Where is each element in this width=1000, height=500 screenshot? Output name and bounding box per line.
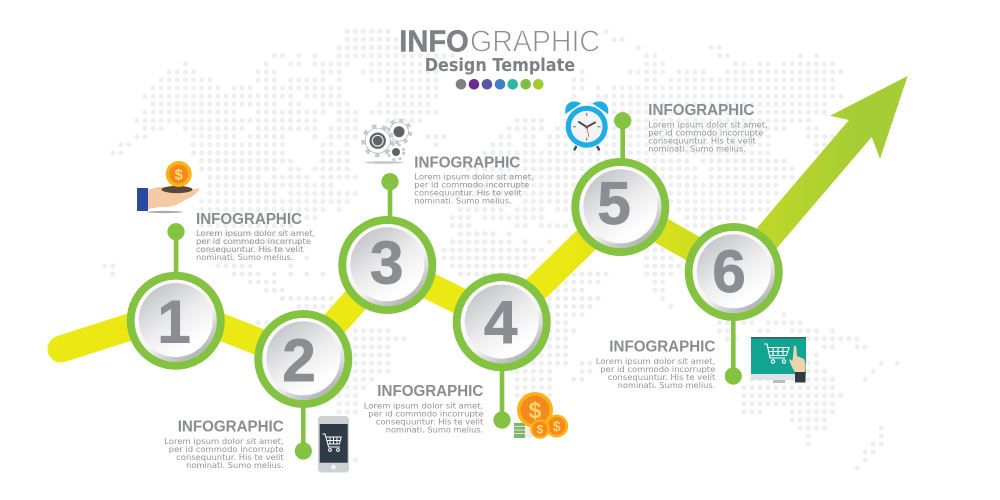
text block 5: per id commodo incorrupte xyxy=(648,128,763,137)
text block 3: nominati. Sumo melius. xyxy=(414,196,512,205)
text block 3: consequuntur. His te velit xyxy=(414,188,522,197)
icon: gold coins and banknotes xyxy=(514,392,568,439)
cart glyph xyxy=(322,434,341,451)
text block 3 xyxy=(414,154,534,205)
text block 1: nominati. Sumo melius. xyxy=(196,253,294,262)
text block 6: INFOGRAPHIC xyxy=(609,339,716,356)
subtitle: Design Template xyxy=(425,56,575,76)
icon: gears xyxy=(363,120,410,164)
text block 6: Lorem ipsum dolor sit amet, xyxy=(596,357,715,366)
icon: desktop monitor with cart xyxy=(751,337,806,383)
text block 2: INFOGRAPHIC xyxy=(178,419,284,436)
colour dots row xyxy=(456,79,544,90)
number 6: 6 xyxy=(712,238,746,305)
text block 6: per id commodo incorrupte xyxy=(600,365,715,374)
icon: hand holding coin: $ xyxy=(175,166,184,184)
text block 4 xyxy=(364,383,484,434)
text block 5: Lorem ipsum dolor sit amet, xyxy=(648,120,768,129)
text block 1: INFOGRAPHIC xyxy=(196,211,302,228)
text block 5: INFOGRAPHIC xyxy=(648,102,755,119)
number 3: 3 xyxy=(370,229,403,296)
text block 4: per id commodo incorrupte xyxy=(368,409,483,418)
step 1 circle xyxy=(131,276,221,366)
icon: gold coins and banknotes: $ xyxy=(529,398,542,424)
title: INFO xyxy=(399,23,469,58)
text block 4: nominati. Sumo melius. xyxy=(386,425,483,434)
text block 1 xyxy=(196,211,316,262)
icon: gold coins and banknotes: $ xyxy=(537,422,544,436)
connector stems and dots xyxy=(167,112,742,460)
icon: hand holding coin xyxy=(137,161,200,213)
title xyxy=(399,23,600,58)
text block 4: INFOGRAPHIC xyxy=(377,383,484,400)
arrow xyxy=(734,76,908,285)
text block 5 xyxy=(648,102,768,153)
icon: alarm clock xyxy=(565,101,608,150)
number 1: 1 xyxy=(157,289,191,356)
number 5: 5 xyxy=(597,170,631,237)
step 4 circle xyxy=(457,277,547,367)
text block 2: per id commodo incorrupte xyxy=(169,445,284,454)
text block 2: Lorem ipsum dolor sit amet, xyxy=(164,437,284,446)
rising line path xyxy=(61,207,734,359)
text block 2: consequuntur. His te velit xyxy=(176,453,284,462)
icon: gold coins and banknotes: $ xyxy=(553,418,561,434)
number 4: 4 xyxy=(484,289,518,356)
text block 1: Lorem ipsum dolor sit amet, xyxy=(196,229,316,238)
step 2 circle xyxy=(258,314,348,404)
icon: smartphone with cart xyxy=(318,416,349,472)
text block 6: consequuntur. His te velit xyxy=(608,373,715,382)
number 2: 2 xyxy=(282,327,316,394)
text block 2 xyxy=(164,419,284,470)
dotted world map background xyxy=(105,31,897,468)
text block 3: per id commodo incorrupte xyxy=(414,180,529,189)
text block 1: consequuntur. His te velit xyxy=(196,245,304,254)
text block 4: consequuntur. His te velit xyxy=(376,417,483,426)
step 6 circle xyxy=(689,227,779,317)
text block 5: nominati. Sumo melius. xyxy=(648,144,746,153)
text block 6 xyxy=(596,339,716,390)
text block 4: Lorem ipsum dolor sit amet, xyxy=(364,401,483,410)
text block 1: per id commodo incorrupte xyxy=(196,237,311,246)
text block 5: consequuntur. His te velit xyxy=(648,136,756,145)
title: GRAPHIC xyxy=(470,23,600,58)
step 5 circle xyxy=(575,162,665,252)
text block 6: nominati. Sumo melius. xyxy=(618,381,715,390)
text block 2: nominati. Sumo melius. xyxy=(186,461,284,470)
text block 3: INFOGRAPHIC xyxy=(414,154,521,171)
cart glyph xyxy=(764,344,789,363)
text block 3: Lorem ipsum dolor sit amet, xyxy=(414,172,534,181)
step 3 circle xyxy=(342,220,432,310)
